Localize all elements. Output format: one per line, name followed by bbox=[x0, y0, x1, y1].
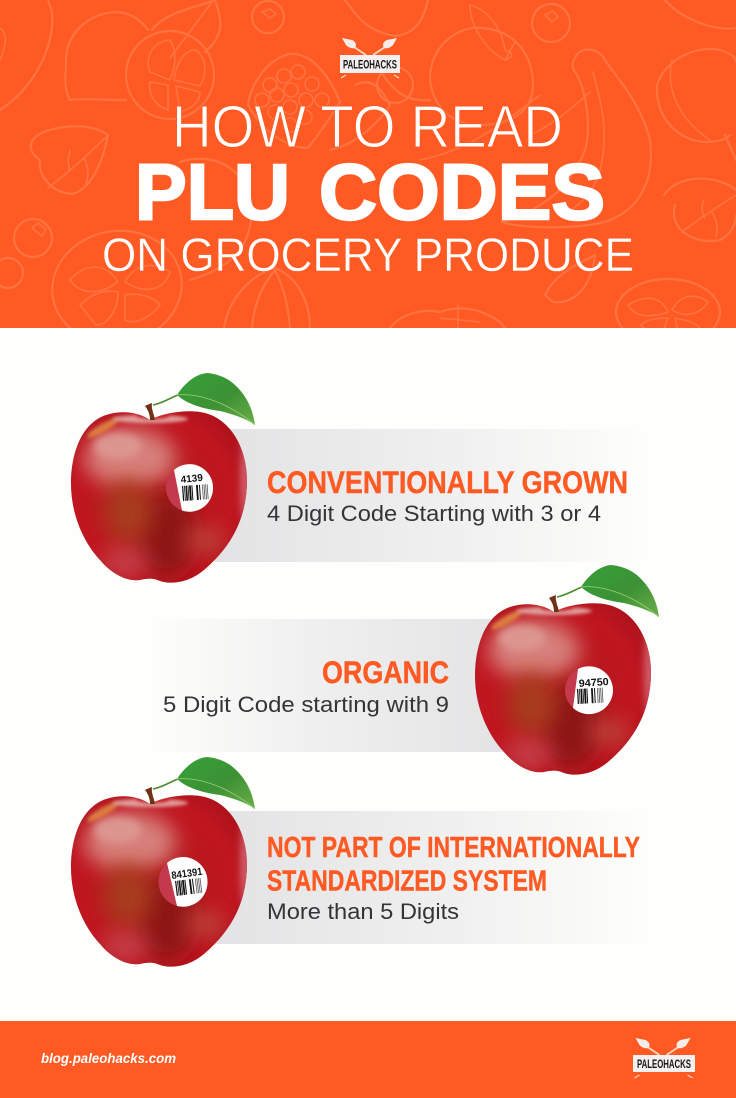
title line: PLU codes: PLU bbox=[135, 147, 290, 236]
heading: not part of internationally standardized system bbox=[267, 832, 640, 898]
title line: how to read: HOW TO READ bbox=[172, 93, 563, 160]
panel: conventionally grown bbox=[215, 429, 650, 562]
logo: PaleoHacks header: PALEOHACKS bbox=[343, 58, 397, 72]
title line: PLU codes bbox=[135, 147, 605, 236]
apple with 94750 sticker: 94750 bbox=[578, 676, 609, 690]
apple with 841391 sticker: 841391 bbox=[171, 866, 203, 882]
apple with 94750 sticker bbox=[475, 565, 659, 775]
footer url: blog.paleohacks.com bbox=[41, 1051, 176, 1066]
panel: organic bbox=[145, 619, 510, 752]
title line: PLU codes: CODES bbox=[319, 147, 605, 236]
apple with 841391 sticker bbox=[71, 757, 255, 967]
heading: conventionally grown: CONVENTIONALLY GROWN bbox=[267, 464, 628, 500]
text: 5 digit code: 5 Digit Code starting with 9 bbox=[163, 692, 449, 717]
footer banner bbox=[0, 1021, 736, 1098]
logo: PaleoHacks footer: PALEOHACKS bbox=[637, 1057, 691, 1071]
apple with 4139 sticker: 4139 bbox=[180, 473, 204, 486]
heading: organic: ORGANIC bbox=[322, 654, 449, 690]
logo: PaleoHacks footer bbox=[633, 1038, 695, 1078]
heading: not part of internationally standardized system: NOT PART OF INTERNATIONALLY bbox=[267, 832, 640, 864]
text: 4 digit code: 4 Digit Code Starting with 3 or 4 bbox=[267, 501, 601, 526]
background fruit outlines bbox=[0, 0, 736, 353]
title line: on grocery produce: ON GROCERY PRODUCE bbox=[102, 229, 634, 282]
panel: not part of internationally standardized system bbox=[215, 811, 650, 944]
heading: not part of internationally standardized system: STANDARDIZED SYSTEM bbox=[267, 866, 547, 898]
text: more than 5 digits: More than 5 Digits bbox=[267, 899, 459, 924]
apple with 4139 sticker bbox=[71, 373, 255, 583]
logo: PaleoHacks header bbox=[340, 38, 400, 78]
header banner bbox=[0, 0, 736, 353]
